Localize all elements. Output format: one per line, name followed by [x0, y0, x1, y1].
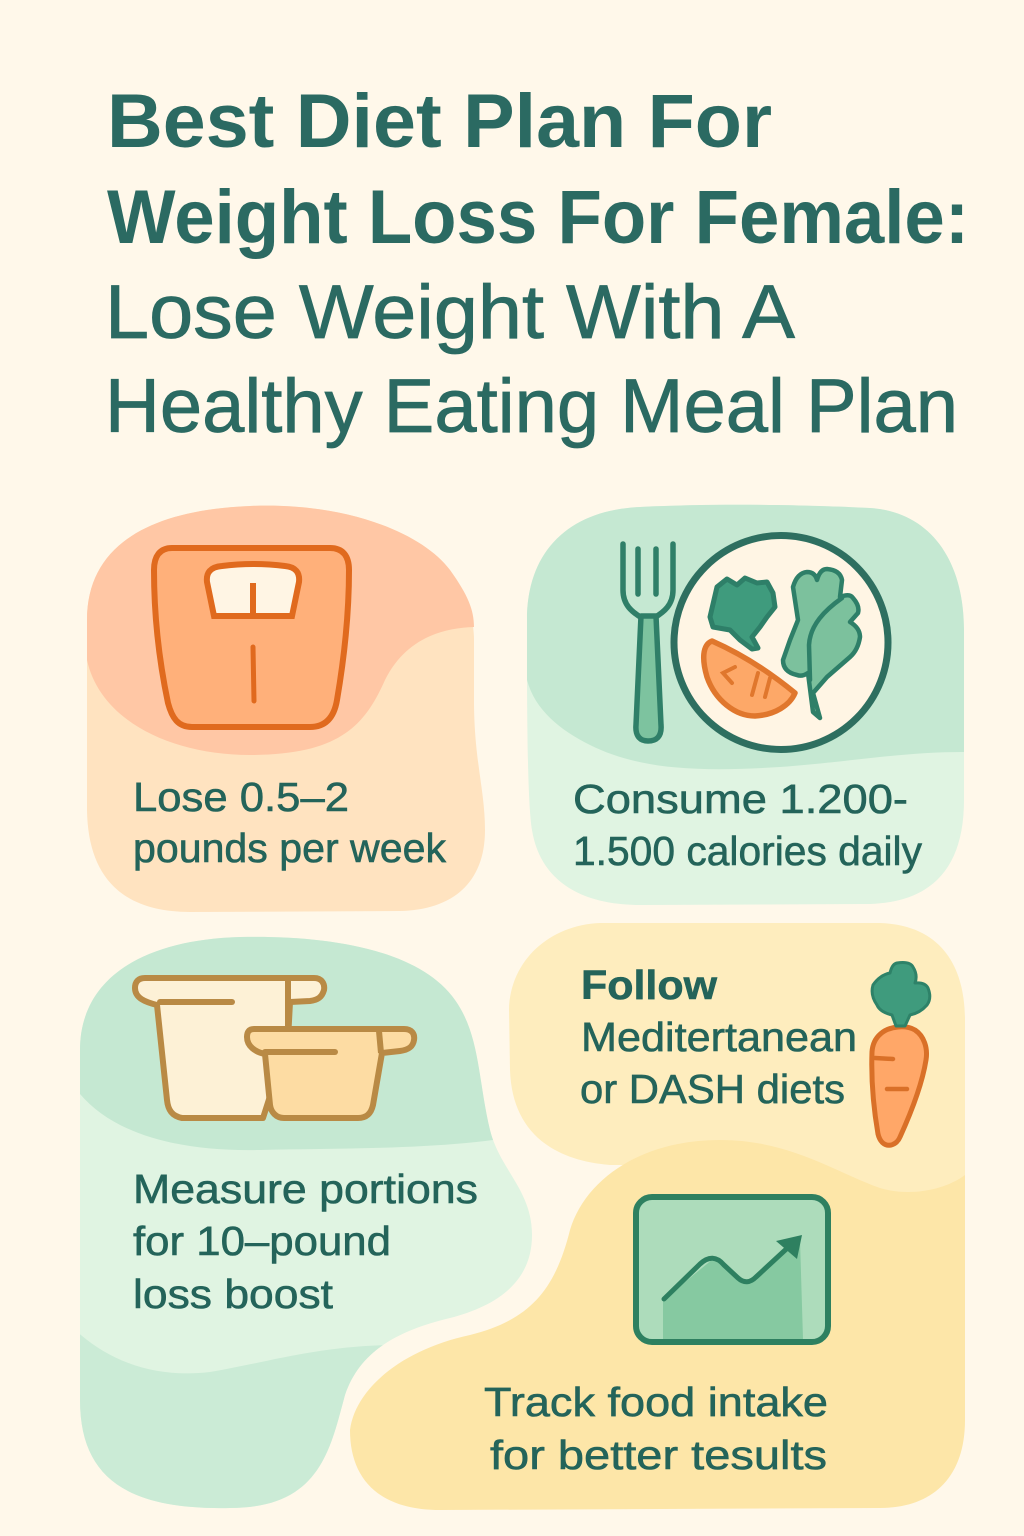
text: follow diets: Meditertanean [581, 1014, 857, 1060]
text: measure portions: loss boost [133, 1271, 334, 1317]
text: consume calories: Consume 1.200- [573, 776, 908, 822]
text: follow diets: or DASH diets [580, 1066, 845, 1112]
panel: track food [350, 1140, 965, 1510]
text: measure portions: Measure portions [133, 1166, 478, 1212]
text: measure portions [133, 1166, 478, 1317]
icon: progress chart [636, 1197, 828, 1342]
panel: lose weight [87, 506, 485, 912]
title: Weight Loss For Female: [107, 175, 969, 260]
text: consume calories: 1.500 calories daily [573, 828, 922, 874]
text: track food intake [484, 1379, 828, 1478]
text: follow diets [580, 962, 857, 1112]
title: Healthy Eating Meal Plan [105, 364, 958, 449]
text: measure portions: for 10–pound [133, 1218, 391, 1264]
text: lose 0.5-2 pounds: Lose 0.5–2 [133, 774, 349, 820]
text: consume calories [573, 776, 922, 874]
panel: mediterranean diets [509, 923, 965, 1200]
title: Lose Weight With A [105, 270, 795, 355]
title [105, 79, 969, 449]
text: track food intake: for better tesults [490, 1432, 827, 1478]
tomato slice [704, 641, 795, 716]
dark leaf [710, 578, 775, 649]
text: lose 0.5-2 pounds [133, 774, 447, 871]
icon: bathroom scale [154, 548, 349, 727]
icon: plate with vegetables [674, 536, 888, 750]
text: track food intake: Track food intake [484, 1379, 828, 1425]
icon: fork [623, 544, 673, 741]
light leaf [783, 569, 860, 718]
panel: measure portions [70, 930, 532, 1520]
icon: carrot [872, 962, 930, 1145]
text: follow diets: Follow [581, 962, 717, 1008]
icon: measuring cups [135, 978, 414, 1118]
panel: calories [527, 505, 964, 905]
text: lose 0.5-2 pounds: pounds per week [133, 825, 447, 871]
title: Best Diet Plan For [107, 79, 772, 164]
